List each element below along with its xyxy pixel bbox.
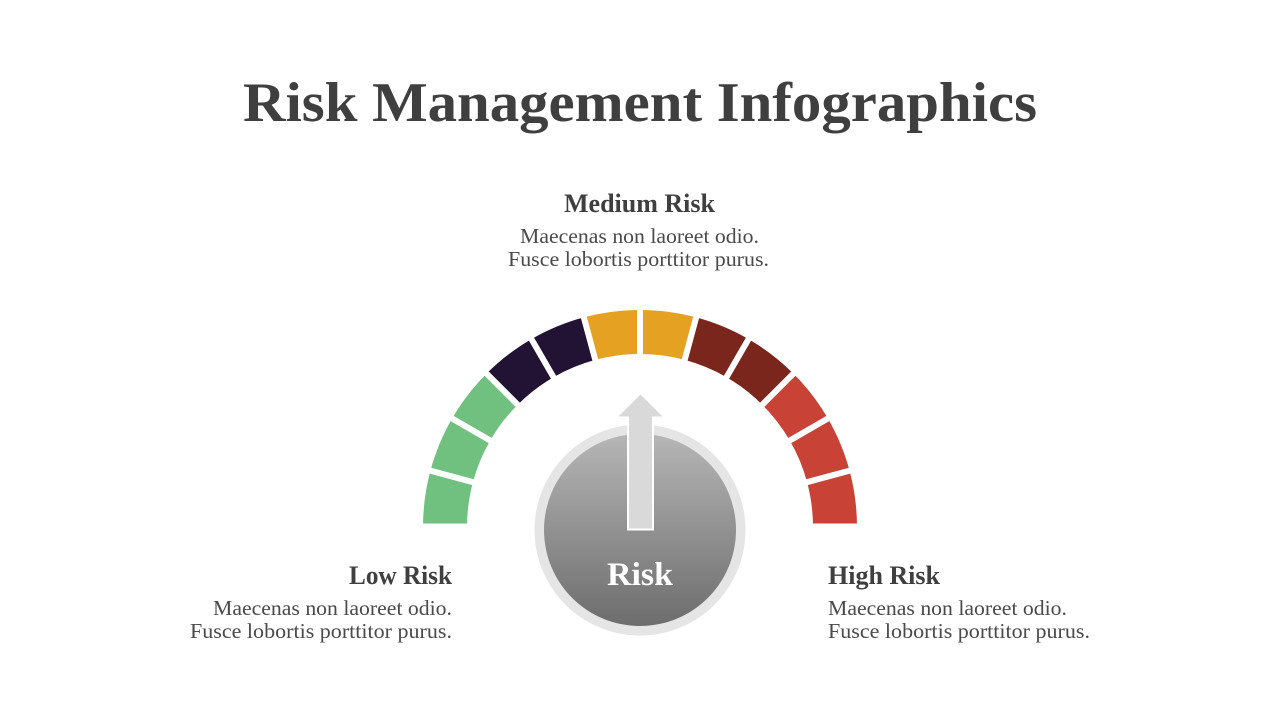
title: Risk Management Infographics (243, 72, 1037, 134)
text block: high risk: Maecenas non laoreet odio. (828, 596, 1067, 620)
text block: medium risk: Fusce lobortis porttitor purus. (508, 247, 769, 271)
dial (534, 393, 746, 636)
gauge segments: high risk (762, 374, 857, 527)
text block: high risk: Fusce lobortis porttitor purus. (828, 619, 1090, 643)
gauge segments: low risk (423, 374, 518, 527)
gauge segments: dark purple (487, 317, 595, 405)
text block: low risk: Fusce lobortis porttitor purus. (190, 619, 452, 643)
text block: low risk: Low Risk (349, 561, 453, 590)
text block: low risk: Maecenas non laoreet odio. (213, 596, 452, 620)
text block: medium risk: Maecenas non laoreet odio. (520, 224, 759, 248)
gauge segments: medium risk (584, 310, 696, 360)
dial outer ring (534, 424, 746, 636)
dial label: Risk (607, 557, 674, 593)
arrow (616, 393, 665, 530)
text block: low risk (190, 561, 453, 643)
gauge segments: maroon (685, 317, 793, 405)
gauge arc (415, 305, 865, 532)
dial inner circle (544, 434, 736, 626)
text block: medium risk: Medium Risk (564, 189, 716, 218)
text block: high risk: High Risk (828, 561, 941, 590)
text block: high risk (828, 561, 1090, 643)
text block: medium risk (508, 189, 769, 271)
